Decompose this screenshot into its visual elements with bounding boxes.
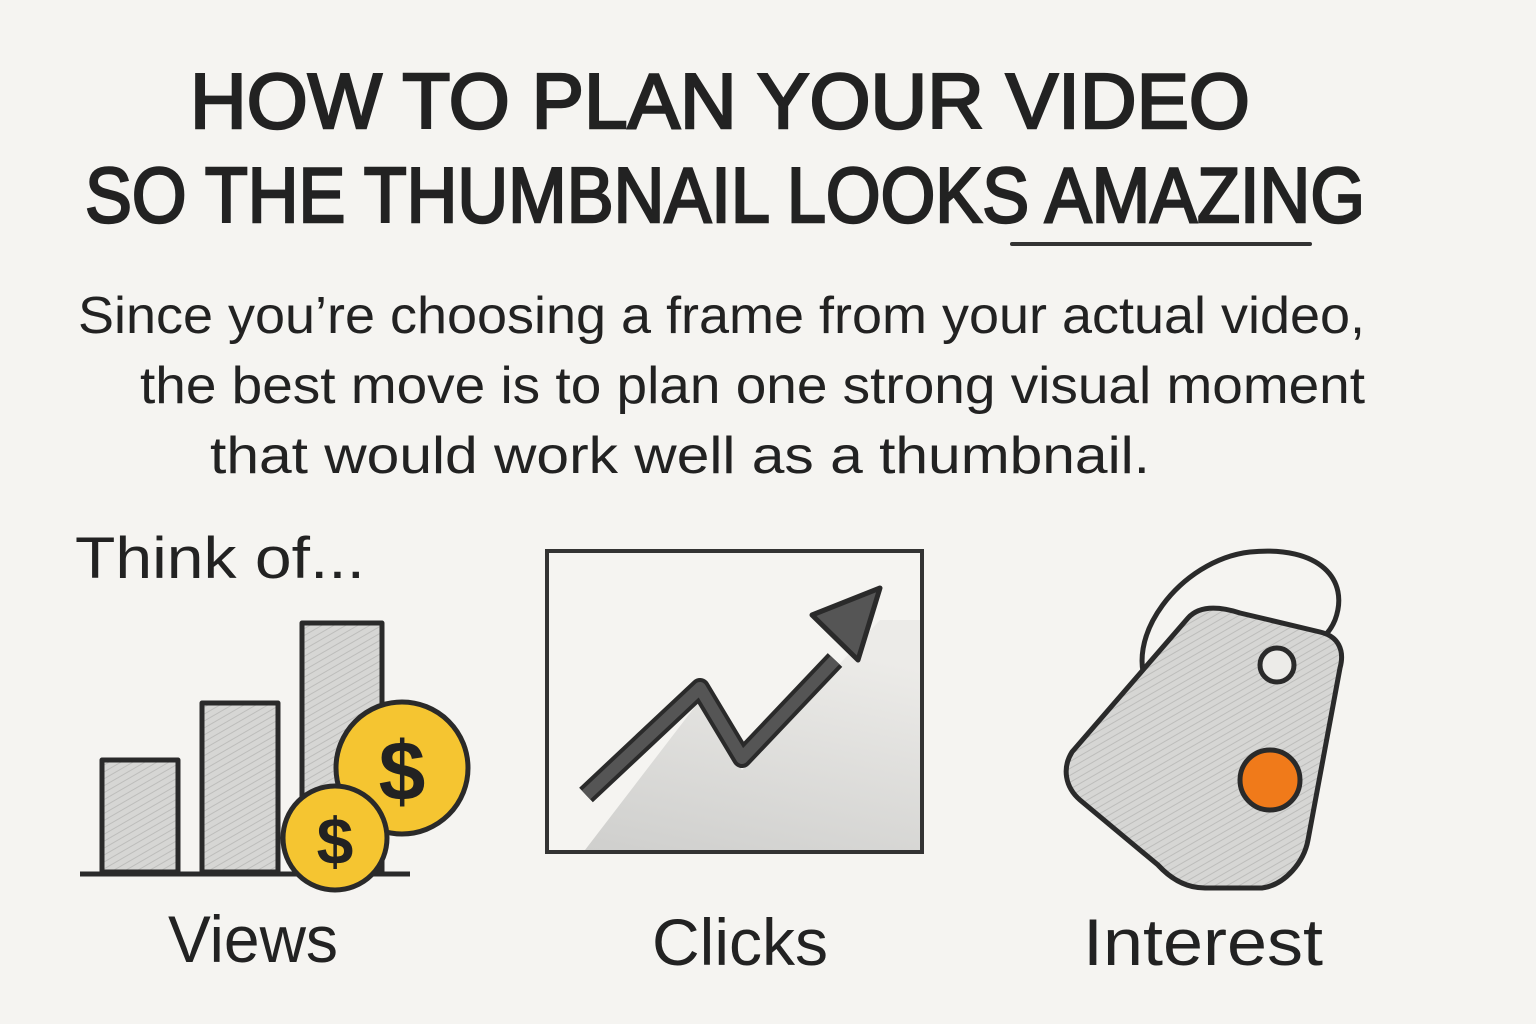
intro text: the best move is to plan one strong visual moment <box>140 357 1366 415</box>
icon: bar chart with coins: $ <box>317 804 353 878</box>
title: SO THE THUMBNAIL LOOKS AMAZING <box>85 151 1365 239</box>
title <box>85 57 1365 244</box>
label: interest: Interest <box>1083 905 1323 979</box>
icon: growth chart <box>547 551 922 852</box>
icon: bar chart with coins: $ <box>379 724 425 818</box>
icon: bar chart with coins <box>80 623 468 890</box>
intro text: Since you’re choosing a frame from your actual video, <box>78 287 1365 345</box>
label: clicks: Clicks <box>652 905 828 979</box>
intro text <box>78 287 1366 485</box>
icon: price tag <box>1066 551 1342 888</box>
label: views: Views <box>168 902 338 976</box>
intro text: that would work well as a thumbnail. <box>210 427 1150 485</box>
title: HOW TO PLAN YOUR VIDEO <box>190 57 1250 145</box>
think of heading: Think of... <box>75 526 365 591</box>
